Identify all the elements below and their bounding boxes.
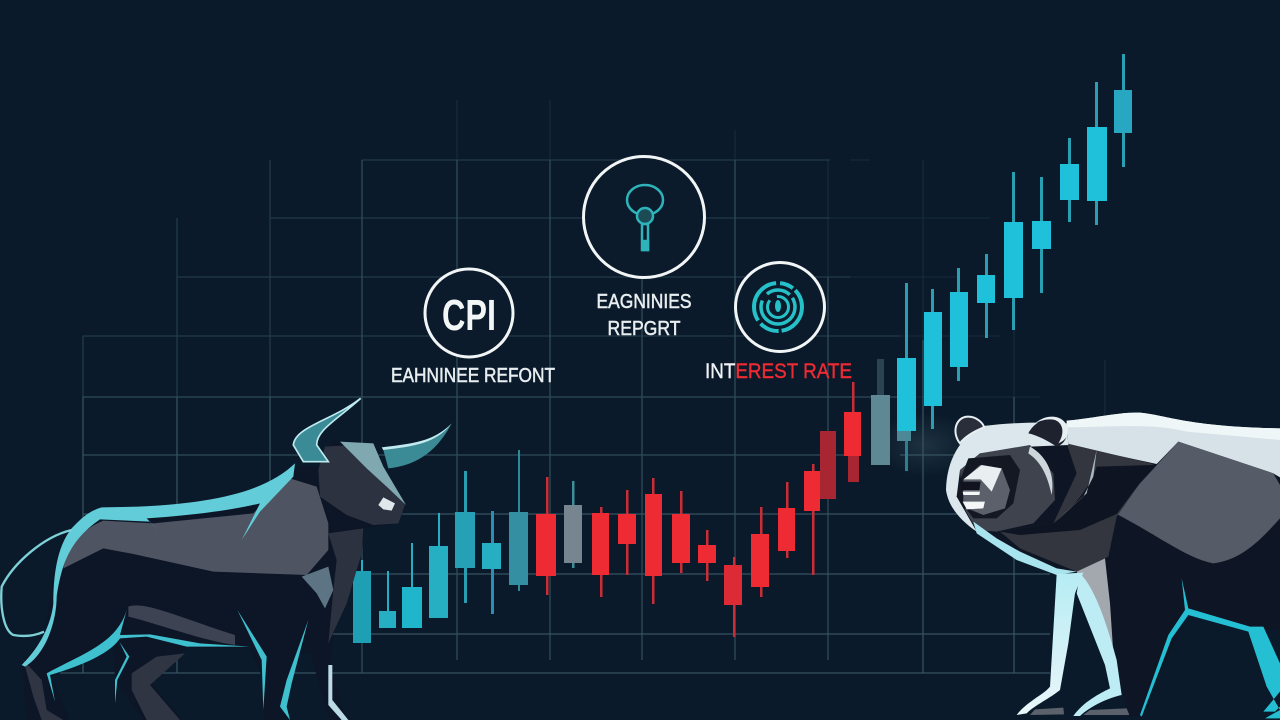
- bear body: [947, 423, 1280, 717]
- icon: key: [627, 185, 663, 250]
- bear muzzle dark: [957, 455, 1020, 518]
- event: interest rate: [705, 262, 852, 383]
- bear left ear: [955, 417, 984, 443]
- bear back highlight: [1067, 413, 1280, 440]
- bear back light band: [1067, 413, 1280, 477]
- bear muzzle: [963, 465, 1010, 515]
- bull front leg lines: [237, 610, 308, 720]
- bull forehead highlight: [340, 442, 406, 505]
- bull chest stripe: [328, 528, 363, 643]
- interest circle badge: [736, 262, 824, 352]
- bear head pale edge: [946, 423, 1068, 532]
- bull illustration: [1, 398, 452, 720]
- CPI circle badge: [425, 269, 513, 357]
- earnings circle badge: [584, 156, 704, 278]
- bear grey front leg: [1077, 558, 1113, 653]
- bull horn left: [293, 398, 361, 462]
- bear right ear: [1028, 418, 1067, 447]
- bear neck dark fold: [1000, 465, 1153, 535]
- bear jaw line: [973, 522, 1077, 575]
- bull rear legs: [23, 653, 185, 720]
- event: CPI: [391, 269, 555, 387]
- bear teeth: [963, 492, 985, 509]
- bear front leg near: [1017, 573, 1083, 715]
- bear saddle: [1117, 442, 1280, 563]
- grey transition candle: [871, 359, 890, 465]
- bull body: [22, 440, 406, 720]
- CPI text: CPI: [442, 291, 496, 340]
- bull front hoof line: [328, 665, 348, 720]
- icon: spiral target: [754, 283, 802, 331]
- bear front leg far: [1073, 573, 1122, 716]
- bull rear leg line: [115, 642, 129, 703]
- earnings caption: REPGRT: [608, 318, 680, 340]
- bull back outline: [22, 463, 295, 667]
- mixed red candles: [536, 382, 861, 637]
- bear belly cyan line: [1140, 578, 1280, 718]
- bear paws: [1030, 708, 1129, 715]
- bull belly outline: [47, 610, 250, 702]
- bear nose highlight: [963, 465, 1002, 492]
- bear cheek highlight: [1028, 447, 1052, 495]
- bull belly shade: [128, 605, 235, 645]
- bear illustration: [946, 413, 1280, 718]
- bull back shading: [63, 477, 328, 575]
- bear head: [960, 445, 1055, 532]
- bear neck highlight: [1053, 450, 1097, 523]
- earnings caption: EAGNINIES: [596, 291, 692, 313]
- interest caption: INTEREST RATE: [705, 360, 852, 383]
- event: earnings report: [584, 156, 704, 340]
- candlestick chart: [353, 54, 1132, 643]
- bull tail: [1, 530, 72, 636]
- bear mouth: [960, 482, 985, 508]
- bear neck: [1000, 443, 1153, 572]
- CPI caption: EAHNINEE REFONT: [391, 365, 555, 387]
- bear right ear rim: [1035, 417, 1068, 443]
- bull head: [318, 445, 405, 525]
- bull chest: [302, 567, 333, 608]
- rising cyan candles: [897, 54, 1132, 471]
- rising teal candles: [353, 450, 528, 643]
- bull horn highlight: [382, 423, 452, 450]
- bull muzzle: [378, 497, 395, 511]
- bull horn right: [383, 423, 452, 468]
